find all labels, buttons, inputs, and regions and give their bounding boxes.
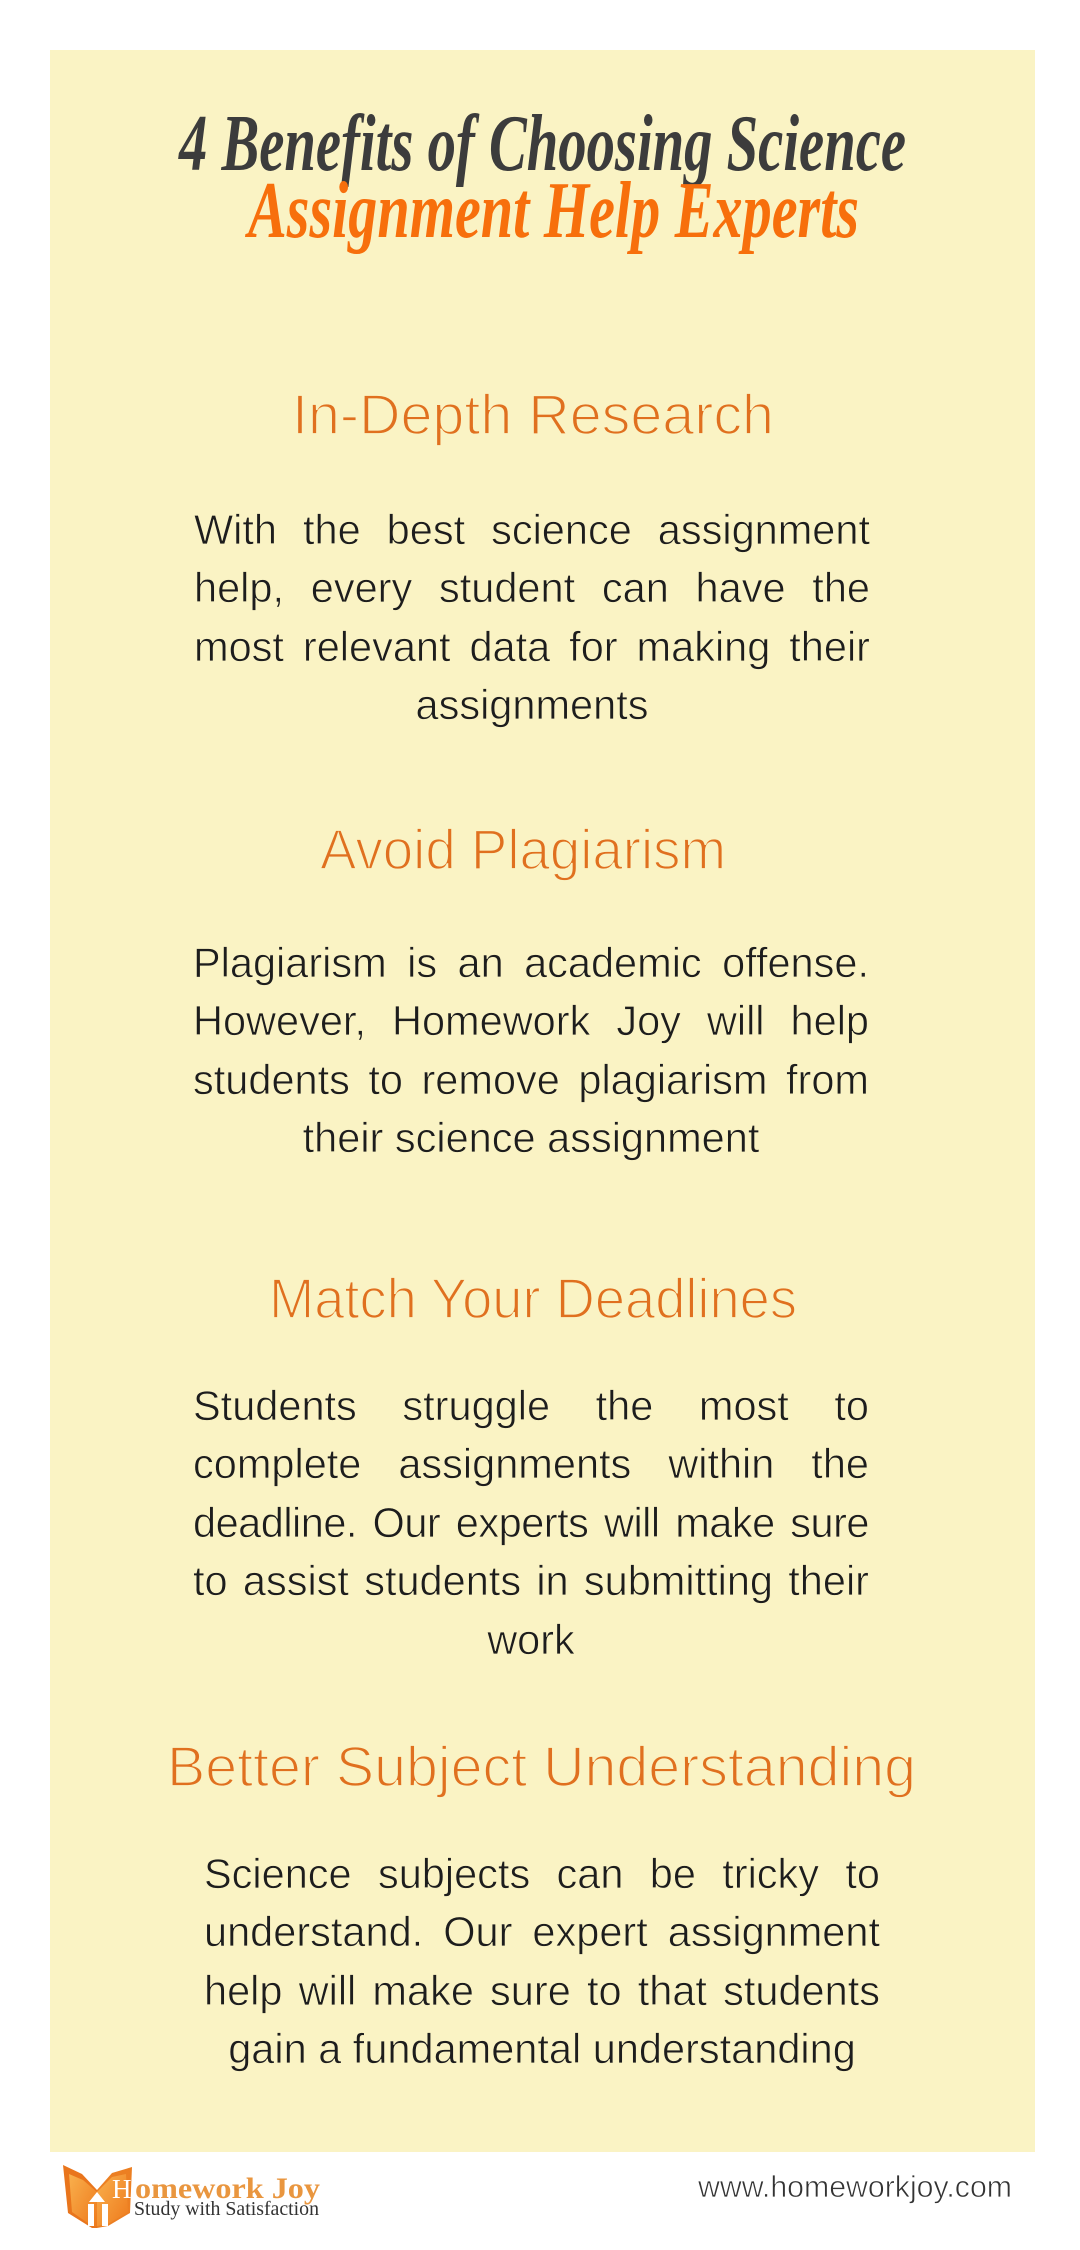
text block: Avoid Plagiarism: their science assignment <box>303 1114 759 1161</box>
footer logo: Homework Joy <box>63 2165 320 2228</box>
icon: open book with pencil <box>63 2165 132 2228</box>
logo wordmark <box>112 2172 320 2220</box>
text block: Avoid Plagiarism: Plagiarism is an academic offense. <box>193 939 869 986</box>
text block: Match Your Deadlines: work <box>487 1616 575 1663</box>
text block: Match Your Deadlines: deadline. Our experts will make sure <box>193 1499 869 1546</box>
title: Assignment Help Experts <box>244 167 859 255</box>
heading: In-Depth Research: In-Depth Research <box>292 383 774 447</box>
text block: Better Subject Understanding: understand. Our expert assignment <box>204 1908 880 1955</box>
text block: Avoid Plagiarism: students to remove plagiarism from <box>193 1056 869 1103</box>
text block: Better Subject Understanding: help will make sure to that students <box>204 1967 880 2014</box>
text block: In-Depth Research: help, every student can have the <box>194 564 870 611</box>
title <box>178 100 906 255</box>
text block: In-Depth Research <box>194 506 870 728</box>
text block: Better Subject Understanding <box>204 1850 880 2072</box>
text block: Match Your Deadlines: Students struggle the most to <box>193 1382 869 1429</box>
footer website url: www.homeworkjoy.com <box>697 2169 1012 2204</box>
text block: Match Your Deadlines: to assist students in submitting their <box>193 1557 869 1604</box>
text block: Match Your Deadlines: complete assignments within the <box>193 1440 869 1487</box>
heading: Better Subject Understanding: Better Subject Understanding <box>167 1735 916 1799</box>
logo wordmark: Study with Satisfaction <box>134 2198 319 2220</box>
text block: In-Depth Research: most relevant data for making their <box>194 623 870 670</box>
logo wordmark: omework Joy <box>135 2172 320 2205</box>
text block: In-Depth Research: assignments <box>416 681 648 728</box>
text block: Avoid Plagiarism: However, Homework Joy will help <box>193 997 869 1044</box>
text block: Match Your Deadlines <box>193 1382 869 1663</box>
logo wordmark: H <box>112 2174 132 2204</box>
text block: Better Subject Understanding: gain a fundamental understanding <box>228 2025 856 2072</box>
heading: Avoid Plagiarism: Avoid Plagiarism <box>320 818 726 882</box>
text block: Avoid Plagiarism <box>193 939 869 1161</box>
text block: Better Subject Understanding: Science subjects can be tricky to <box>204 1850 880 1897</box>
heading: Match Your Deadlines: Match Your Deadlines <box>269 1267 797 1331</box>
text block: In-Depth Research: With the best science assignment <box>194 506 870 553</box>
